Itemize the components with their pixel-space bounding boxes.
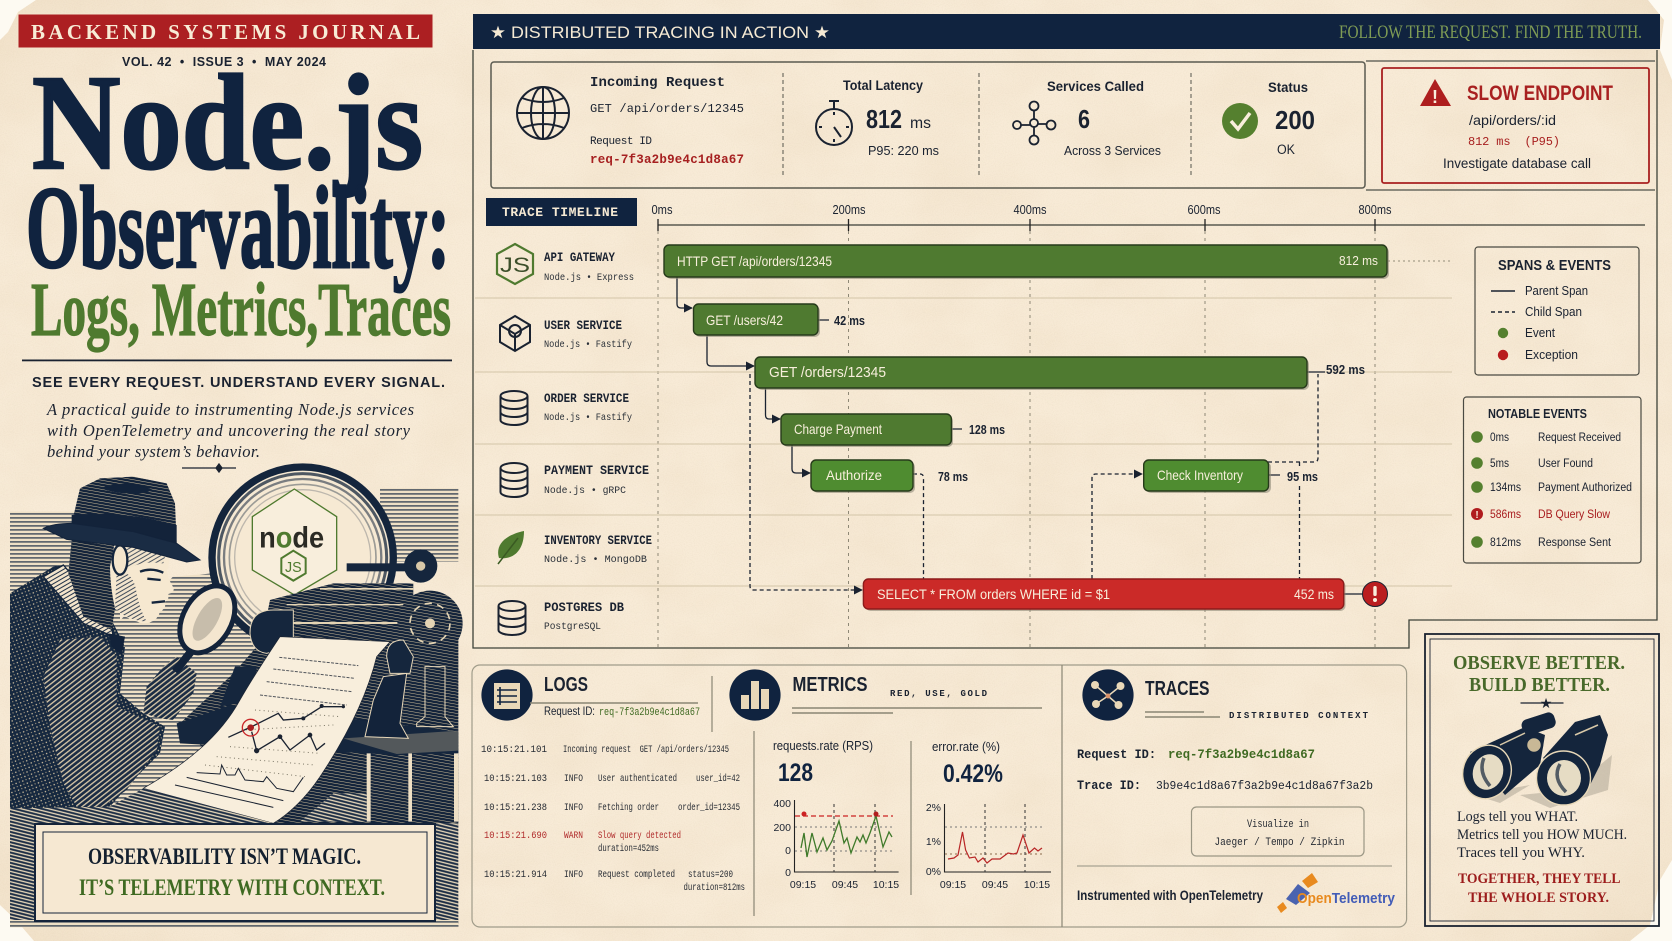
log lines: status=200 — [688, 869, 733, 881]
log lines: order_id=12345 — [678, 802, 740, 814]
chart: requests rate: 200 — [773, 822, 791, 834]
log lines: user_id=42 — [696, 773, 740, 785]
span: HTTP GET — [664, 245, 1389, 279]
panel: closing poster: THE WHOLE STORY. — [1468, 890, 1609, 906]
intro text: A practical guide to instrumenting Node.js services — [46, 400, 414, 419]
metric: status: OK — [1277, 142, 1295, 157]
log lines — [481, 744, 745, 894]
panel: traces: Request ID: — [1077, 748, 1156, 762]
service: postgres db: PostgreSQL — [544, 621, 601, 633]
panel: metrics — [729, 669, 1051, 891]
log lines: WARN — [564, 830, 583, 842]
service: inventory service: Node.js • MongoDB — [544, 554, 647, 566]
span: HTTP GET: 812 ms — [1339, 253, 1378, 268]
masthead banner — [18, 14, 433, 48]
chart: error rate: 1% — [926, 836, 941, 848]
chart: error rate: 0% — [926, 866, 941, 878]
panel: notable events: Response Sent — [1538, 537, 1612, 549]
panel: notable events: Request Received — [1538, 432, 1621, 444]
chart: error rate: 10:15 — [1024, 879, 1050, 891]
icon: exception marker — [1362, 582, 1388, 606]
sun disc with node logo: node — [259, 521, 324, 554]
metric: status — [1222, 79, 1315, 157]
callout: slow endpoint — [1382, 68, 1649, 183]
title — [26, 48, 451, 352]
icon: binoculars — [1456, 711, 1612, 808]
panel: notable events: 5ms — [1490, 458, 1509, 470]
sun disc with node logo — [212, 467, 393, 648]
service: inventory service: INVENTORY SERVICE — [544, 533, 652, 548]
span: check inventory: 95 ms — [1287, 470, 1318, 484]
legend: spans and events: Child Span — [1525, 305, 1582, 319]
service: order service: Node.js • Fastify — [544, 412, 632, 424]
chart: error rate: 2% — [926, 802, 941, 814]
issue line: VOL. 42 • ISSUE 3 • MAY 2024 — [122, 55, 326, 69]
service: user service — [500, 316, 632, 351]
callout: slow endpoint: /api/orders/:id — [1469, 113, 1556, 128]
icon: logs — [481, 669, 533, 721]
log lines: 10:15:21.914 — [484, 869, 547, 881]
panel: closing poster: Logs tell you WHAT. — [1457, 809, 1578, 825]
callout: telemetry with context: IT’S TELEMETRY WITH CONTEXT. — [79, 875, 385, 900]
panel: metrics: METRICS — [792, 674, 868, 696]
request details — [590, 75, 744, 167]
chart: requests rate: 09:45 — [832, 879, 858, 891]
metric: total latency: P95: 220 ms — [868, 143, 939, 158]
span: charge payment: Charge Payment — [794, 421, 882, 437]
metric: requests rate: 128 — [778, 759, 813, 787]
visualize box — [1192, 807, 1364, 856]
service: postgres db — [498, 600, 624, 635]
span: authorize: Authorize — [826, 467, 882, 483]
log lines: Fetching order — [598, 802, 659, 814]
log lines: 10:15:21.103 — [484, 773, 547, 785]
header bar: distributed tracing — [473, 14, 1660, 49]
metric: services called: Services Called — [1047, 78, 1144, 94]
metric: total latency: 812 — [866, 104, 902, 134]
chart: requests rate: 10:15 — [873, 879, 899, 891]
metric: total latency: Total Latency — [843, 77, 923, 93]
panel: notable events: NOTABLE EVENTS — [1488, 406, 1587, 421]
span: charge payment — [781, 414, 1005, 447]
panel: closing poster: Metrics tell you HOW MUCH. — [1457, 827, 1627, 843]
span: authorize — [811, 460, 968, 493]
metric: status: Status — [1268, 79, 1308, 95]
icon: metrics — [729, 669, 781, 721]
service: postgres db: POSTGRES DB — [544, 600, 624, 615]
panel: traces: TRACES — [1145, 678, 1210, 700]
service: payment service: PAYMENT SERVICE — [544, 463, 649, 478]
service: inventory service — [498, 531, 652, 566]
service: payment service — [500, 463, 649, 497]
panel: logs: req-7f3a2b9e4c1d8a67 — [599, 707, 700, 719]
heading: trace timeline: TRACE TIMELINE — [502, 205, 618, 220]
service: api gateway: JS — [500, 254, 530, 277]
log lines: Slow query detected — [598, 830, 681, 842]
panel: notable events — [1464, 397, 1641, 563]
timeline axis: 400ms — [1014, 202, 1047, 217]
panel: notable events: 134ms — [1490, 482, 1521, 494]
chart: requests rate: 0 — [785, 845, 791, 857]
heading: trace timeline — [486, 198, 637, 226]
panel: metrics: RED, USE, GOLD — [890, 689, 988, 699]
metric: status: 200 — [1275, 105, 1315, 135]
span: charge payment: 128 ms — [969, 423, 1005, 437]
icon: globe — [517, 87, 569, 139]
panel: traces: Trace ID: — [1077, 779, 1141, 793]
metric: services called — [1013, 78, 1161, 158]
callout: telemetry with context: OBSERVABILITY ISN’T MAGIC. — [88, 844, 361, 869]
log lines: INFO — [564, 869, 583, 881]
panel: notable events: 586ms — [1490, 509, 1521, 521]
span: slow SQL query: SELECT * FROM orders WHERE id = $1 — [877, 586, 1110, 602]
span: slow SQL query — [863, 579, 1346, 611]
service: order service: ORDER SERVICE — [544, 391, 629, 406]
span: authorize: 78 ms — [938, 470, 968, 484]
icon: opentelemetry logo: OpenTelemetry — [1297, 890, 1396, 907]
span: GET orders: 592 ms — [1326, 363, 1365, 377]
log lines: duration=812ms — [684, 882, 745, 894]
legend: spans and events — [1475, 247, 1639, 375]
visualize box: Visualize in — [1247, 819, 1309, 831]
log lines: 10:15:21.690 — [484, 830, 547, 842]
callout: slow endpoint: SLOW ENDPOINT — [1467, 82, 1613, 105]
ornament — [182, 464, 236, 472]
metric: total latency — [816, 77, 939, 158]
timeline axis — [475, 202, 1645, 648]
panel: notable events: DB Query Slow — [1538, 509, 1611, 521]
paper printout with charts — [143, 637, 390, 823]
detective — [10, 477, 246, 813]
title: Observability: — [26, 162, 450, 293]
metric: requests rate — [773, 738, 899, 891]
panel: logs: Request ID: — [544, 704, 595, 718]
panel: closing poster: Traces tell you WHY. — [1457, 845, 1585, 861]
chart: error rate — [926, 802, 1051, 891]
service: api gateway: Node.js • Express — [544, 272, 634, 284]
icon: traces — [1082, 669, 1134, 721]
log lines: User authenticated — [598, 773, 677, 785]
printing press — [177, 620, 458, 823]
panel: notable events: Payment Authorized — [1538, 482, 1632, 494]
metric: total latency: ms — [910, 115, 931, 132]
panel: logs: LOGS — [544, 674, 588, 696]
panel: notable events: ! — [1475, 510, 1479, 521]
log lines: INFO — [564, 773, 583, 785]
service: order service — [500, 391, 632, 425]
sun disc with node logo: JS — [285, 560, 302, 576]
log lines: 10:15:21.238 — [484, 802, 547, 814]
header bar: distributed tracing: ★ DISTRIBUTED TRACING IN ACTION ★ — [490, 23, 830, 42]
panel: traces: Instrumented with OpenTelemetry — [1077, 887, 1263, 903]
log lines: Request completed — [598, 869, 675, 881]
timeline axis: 0ms — [652, 202, 673, 217]
title: Node.js — [32, 48, 423, 198]
panel: traces: 3b9e4c1d8a67f3a2b9e4c1d8a67f3a2b — [1156, 780, 1373, 793]
metric: error rate — [926, 739, 1051, 891]
service: user service: Node.js • Fastify — [544, 339, 632, 351]
service: user service: USER SERVICE — [544, 318, 622, 333]
legend: spans and events: Exception — [1525, 348, 1578, 362]
chart: requests rate: 0 — [785, 867, 791, 879]
panel: traces: DISTRIBUTED CONTEXT — [1229, 711, 1369, 721]
metric: requests rate: requests.rate (RPS) — [773, 738, 873, 753]
panel: traces — [1077, 669, 1396, 913]
span: GET users — [694, 304, 865, 337]
title: Logs, Metrics,Traces — [31, 268, 451, 352]
legend: spans and events: Parent Span — [1525, 284, 1588, 298]
span: GET orders — [755, 357, 1365, 390]
intro text: behind your system’s behavior. — [47, 442, 260, 461]
callout: slow endpoint: Investigate database call — [1443, 156, 1591, 171]
icon: opentelemetry logo — [1277, 873, 1396, 913]
metric: services called: Across 3 Services — [1064, 143, 1161, 158]
panel: traces: req-7f3a2b9e4c1d8a67 — [1168, 748, 1315, 762]
span: slow SQL query: 452 ms — [1294, 587, 1334, 602]
span: GET users: 42 ms — [834, 314, 865, 328]
ornament: ★ — [1540, 695, 1552, 711]
chart: error rate: 09:15 — [940, 879, 966, 891]
visualize box: Jaeger / Tempo / Zipkin — [1214, 837, 1344, 849]
log lines: INFO — [564, 802, 583, 814]
span: HTTP GET: HTTP GET /api/orders/12345 — [677, 253, 832, 269]
panel: closing poster — [1425, 634, 1659, 926]
timeline axis: 800ms — [1358, 202, 1392, 217]
masthead banner: BACKEND SYSTEMS JOURNAL — [31, 20, 420, 44]
panel: request summary — [491, 61, 1655, 190]
callout: slow endpoint: 812 ms (P95) — [1468, 135, 1560, 149]
connectors — [677, 261, 1452, 594]
callout: slow endpoint: ! — [1432, 87, 1438, 107]
chart: requests rate: 09:15 — [790, 879, 816, 891]
panel: notable events: 0ms — [1490, 432, 1509, 444]
service: api gateway — [497, 244, 634, 284]
panel: logs — [481, 669, 745, 894]
panel: notable events: 812ms — [1490, 537, 1521, 549]
chart: requests rate — [773, 798, 899, 891]
legend: spans and events: SPANS & EVENTS — [1498, 258, 1611, 274]
service: api gateway: API GATEWAY — [544, 250, 615, 265]
chart: requests rate: 400 — [773, 798, 791, 810]
service: payment service: Node.js • gRPC — [544, 485, 626, 497]
request details: GET /api/orders/12345 — [590, 102, 744, 116]
legend: spans and events: Event — [1525, 326, 1555, 340]
panel: notable events: User Found — [1538, 458, 1593, 470]
callout: telemetry with context — [35, 824, 435, 921]
log lines: 10:15:21.101 — [481, 744, 547, 756]
panel: closing poster: BUILD BETTER. — [1469, 674, 1610, 696]
span: GET orders: GET /orders/12345 — [769, 364, 886, 381]
intro text: with OpenTelemetry and uncovering the real story — [47, 421, 411, 440]
span: check inventory: Check Inventory — [1157, 467, 1243, 483]
metric: error rate: error.rate (%) — [932, 739, 1000, 754]
metric: services called: 6 — [1078, 104, 1090, 134]
rollers — [250, 549, 463, 673]
log lines: duration=452ms — [598, 843, 659, 855]
request details: req-7f3a2b9e4c1d8a67 — [590, 153, 744, 167]
panel: closing poster: OBSERVE BETTER. — [1453, 652, 1625, 674]
span: GET users: GET /users/42 — [706, 312, 783, 328]
panel: closing poster: TOGETHER, THEY TELL — [1458, 871, 1620, 887]
chart: error rate: 09:45 — [982, 879, 1008, 891]
timeline axis: 600ms — [1188, 202, 1221, 217]
request details: Incoming Request — [590, 75, 725, 91]
intro text — [46, 400, 414, 461]
ornament — [1520, 695, 1564, 711]
request details: Request ID — [590, 136, 652, 148]
log lines: Incoming request GET /api/orders/12345 — [563, 744, 729, 756]
bottom panel frame — [472, 665, 1407, 927]
span: check inventory — [1144, 460, 1318, 493]
illustration: detective inspecting trace printout — [10, 467, 463, 927]
main trace frame — [473, 50, 1657, 648]
timeline axis: 200ms — [832, 202, 866, 217]
tagline: SEE EVERY REQUEST. UNDERSTAND EVERY SIGNAL. — [32, 375, 445, 391]
metric: error rate: 0.42% — [943, 760, 1003, 788]
